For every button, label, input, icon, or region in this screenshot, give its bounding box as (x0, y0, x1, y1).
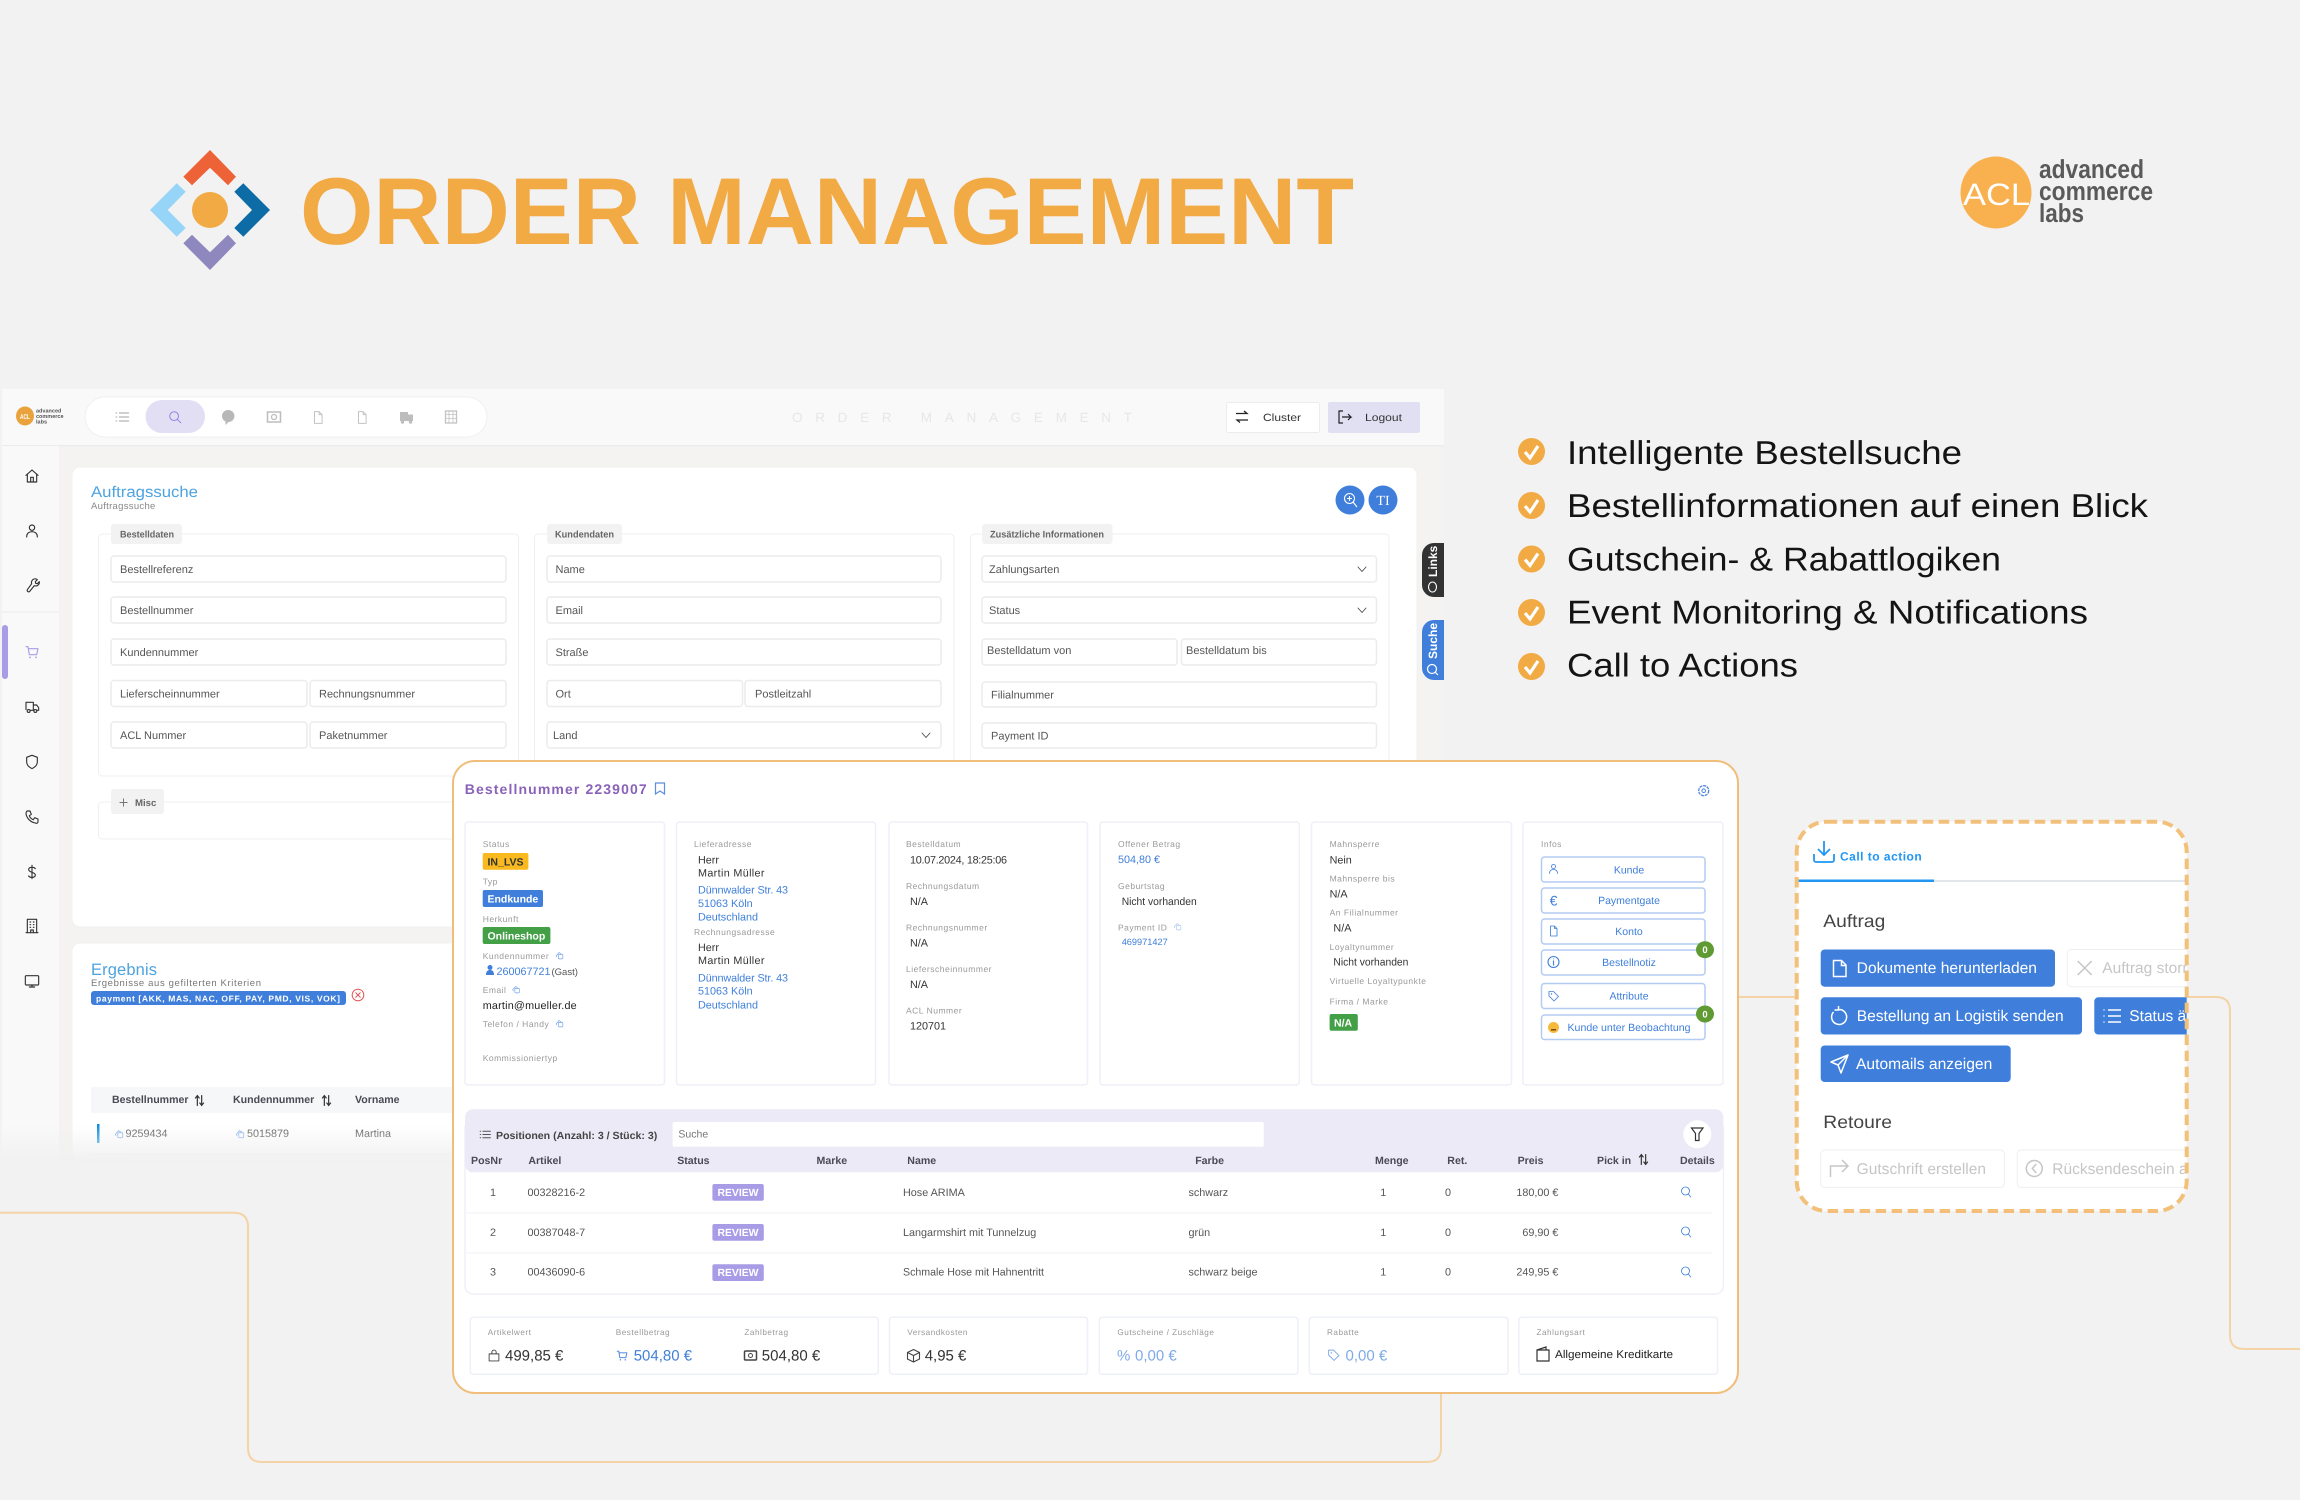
info panel: payment: Geburtstag (1118, 881, 1165, 891)
result table: Bestellnummer (112, 1094, 189, 1106)
fieldset: Bestelldaten: Rechnungsnummer (319, 688, 415, 700)
summary: Rabatte: Rabatte (1327, 1328, 1359, 1337)
button: Status ändern: Status ändern (2129, 1008, 2226, 1025)
badge: note count (1696, 941, 1714, 958)
badge: N/A (1330, 1014, 1358, 1031)
info panel: status: (Gast) (552, 967, 578, 978)
panel: call to action (1794, 820, 2189, 1213)
badge: note count: 0 (1702, 945, 1708, 956)
fieldset: Bestelldaten: Bestellnummer (120, 605, 194, 617)
summary: values: Bestellbetrag (616, 1328, 670, 1337)
summary: Zahlungsart: Allgemeine Kreditkarte (1555, 1349, 1673, 1361)
heading: Retoure: Retoure (1823, 1112, 1892, 1132)
info panel: infos buttons (1523, 822, 1723, 1085)
icon: monitor (25, 976, 39, 987)
button: Bestellnotiz: Bestellnotiz (1602, 957, 1656, 969)
badge: IN_LVS: IN_LVS (488, 856, 523, 868)
button: Bestellnotiz (1542, 950, 1705, 975)
fieldset: Bestelldaten: Paketnummer (319, 730, 388, 742)
button: Dokumente herunterladen (1821, 950, 2055, 987)
table row 1: schwarz (1188, 1187, 1228, 1199)
title: ORDER MANAGEMENT (300, 159, 1354, 265)
badge: Onlineshop (483, 927, 550, 944)
feature: Bestellinformationen auf einen Blick: Bestellinformationen auf einen Blick (1567, 487, 2149, 524)
table row 2: 2 (490, 1227, 496, 1239)
fieldset: Zusätzliche Informationen: Status (989, 605, 1021, 617)
fieldset: Kundendaten (534, 524, 954, 776)
result table: Kundennummer (233, 1094, 314, 1106)
table header: Preis (1518, 1155, 1544, 1167)
info panel: addresses: Martin Müller (698, 868, 765, 880)
summary: Zahlungsart (1519, 1317, 1718, 1374)
fieldset: Bestelldaten: ACL Nummer (120, 730, 187, 742)
table row 3: 00436090-6 (528, 1267, 585, 1279)
table header: PosNr (471, 1155, 502, 1167)
button: Attribute: Attribute (1609, 990, 1649, 1002)
panel: order details card (453, 761, 1738, 1393)
info panel: addresses: Herr (698, 942, 719, 954)
heading: Ergebnis: Ergebnis (91, 961, 157, 979)
summary: values: 499,85 € (505, 1348, 564, 1365)
button: Gutschrift erstellen (1821, 1150, 2004, 1187)
info panel: dates: Lieferscheinnummer (906, 964, 992, 974)
table row 1: Hose ARIMA (903, 1187, 966, 1199)
fieldset: Kundendaten: Postleitzahl (755, 688, 811, 700)
info panel: dunning and loyalty: Mahnsperre bis (1330, 873, 1395, 883)
text size button: TI (1376, 494, 1390, 509)
feature: Event Monitoring und Notifications: Event Monitoring & Notifications (1567, 594, 2088, 630)
summary: Versandkosten (890, 1317, 1088, 1374)
info panel: dunning and loyalty: N/A (1333, 923, 1352, 935)
info panel: addresses: Lieferadresse (694, 839, 752, 849)
info panel: dunning and loyalty: Mahnsperre (1330, 839, 1380, 849)
fieldset: Bestelldaten: Kundennummer (120, 647, 199, 659)
info panel: status: Status (483, 839, 510, 849)
table row 1: REVIEW (718, 1188, 759, 1199)
badge: N/A: N/A (1334, 1018, 1352, 1030)
table row 1: 00328216-2 (528, 1187, 585, 1199)
info panel: dates (889, 822, 1088, 1085)
info panel: dunning and loyalty: Nein (1330, 854, 1352, 866)
brand logo: advanced commerce labs: ACL (1963, 177, 2030, 212)
summary: Zahlungsart: Zahlungsart (1536, 1328, 1585, 1337)
summary: values (470, 1317, 878, 1374)
info panel: status: Telefon / Handy (483, 1019, 550, 1029)
watermark title: ORDER MANAGEMENT (792, 410, 1132, 425)
button: Status ändern (2094, 997, 2187, 1034)
info panel: addresses: 51063 Köln (698, 986, 753, 998)
fieldset: Zusätzliche Informationen: Payment ID (991, 730, 1049, 742)
button: Kunde: Kunde (1614, 864, 1644, 876)
icon: shield (27, 755, 37, 769)
info panel: payment: Payment ID (1118, 922, 1167, 932)
summary: values: 504,80 € (762, 1348, 821, 1365)
summary: Rabatte: 0,00 € (1346, 1348, 1388, 1365)
summary: Gutscheine: Gutscheine / Zuschläge (1117, 1328, 1214, 1337)
fieldset: Kundendaten: Email (556, 605, 583, 617)
button: Auftrag stornieren: Auftrag stornieren (2102, 960, 2226, 977)
fieldset: Zusätzliche Informationen: Zusätzliche Informationen (990, 530, 1104, 540)
button: Paymentgate (1542, 888, 1705, 913)
icon: truck (26, 702, 39, 712)
tab: Call to action: Call to action (1840, 850, 1922, 864)
info panel: addresses: Herr (698, 854, 719, 866)
result table: Vorname (355, 1094, 400, 1106)
fieldset: Kundendaten: Ort (556, 688, 571, 700)
filter chip (91, 991, 346, 1005)
brand logo: advanced commerce labs: labs (2039, 198, 2084, 228)
table header: Status (677, 1155, 710, 1167)
table row 2: 00387048-7 (528, 1227, 585, 1239)
fieldset: Zusätzliche Informationen (970, 524, 1389, 776)
panel: app screenshot (2, 389, 1444, 1161)
button: Bestellung an Logistik senden: Bestellung an Logistik senden (1857, 1008, 2064, 1025)
feature: Gutschein- und Rabattlogiken: Gutschein- & Rabattlogiken (1567, 540, 2001, 578)
info panel: dates: N/A (910, 979, 929, 991)
brand logo: advanced commerce labs: commerce (2039, 176, 2153, 206)
info panel: payment: 469971427 (1122, 937, 1168, 947)
table row 2 (490, 1224, 1691, 1241)
result table: 5015879 (247, 1128, 289, 1140)
fieldset: Zusätzliche Informationen: Zahlungsarten (989, 564, 1059, 576)
tab: Call to action (1797, 841, 2187, 882)
button: Auftrag stornieren (2067, 949, 2187, 988)
info panel: payment (1100, 822, 1299, 1085)
icon: settings (1699, 786, 1709, 796)
info panel: status: Typ (483, 877, 498, 887)
summary: values: Artikelwert (488, 1328, 532, 1337)
table row 3: schwarz beige (1188, 1267, 1258, 1279)
positions table (465, 1109, 1723, 1294)
info panel: dunning and loyalty: Firma / Marke (1330, 997, 1389, 1007)
info panel: dates: 10.07.2024, 18:25:06 (910, 854, 1007, 866)
result table: 9259434 (126, 1128, 168, 1140)
side tab: Links: Links (1426, 545, 1440, 577)
badge: Onlineshop: Onlineshop (488, 930, 545, 942)
table row 2: REVIEW (718, 1228, 759, 1239)
info panel: dunning and loyalty: Virtuelle Loyaltypunkte (1330, 976, 1426, 986)
table header (465, 1109, 1723, 1172)
fieldset: Zusätzliche Informationen: Bestelldatum bis (1186, 645, 1267, 657)
filter chip: payment [AKK, MAS, NAC, OFF, PAY, PMD, VIS, VOK] (96, 994, 340, 1004)
side tab: Links (1422, 543, 1444, 597)
mini logo: labs (36, 420, 47, 426)
badge: watch count (1696, 1006, 1714, 1022)
table header: Menge (1375, 1155, 1409, 1167)
info panel: status: Kundennummer (483, 951, 549, 961)
table header: Farbe (1195, 1155, 1224, 1167)
info panel: dunning and loyalty: Nicht vorhanden (1333, 957, 1408, 969)
table row 3: 249,95 € (1516, 1267, 1558, 1279)
brand logo: advanced commerce labs (1960, 154, 2153, 228)
title logo: diamond mark (150, 150, 270, 270)
info panel: addresses: Deutschland (698, 912, 758, 924)
info panel: addresses: Deutschland (698, 999, 758, 1011)
button: Kunde (1542, 857, 1705, 882)
info panel: status: Kommissioniertyp (483, 1053, 558, 1063)
fieldset: Bestelldaten (98, 524, 518, 776)
fieldset: Zusätzliche Informationen: Bestelldatum von (987, 645, 1071, 657)
info panel: dunning and loyalty: N/A (1330, 888, 1348, 900)
text size button (1368, 486, 1398, 514)
info panel: addresses (676, 822, 876, 1085)
table header: Suche (678, 1129, 708, 1141)
button: Bestellung an Logistik senden (1821, 997, 2082, 1034)
table header: Positionen (Anzahl: 3 / Stück: 3) (496, 1131, 657, 1142)
icon: home (26, 470, 38, 482)
button: Gutschrift erstellen: Gutschrift erstellen (1857, 1161, 1986, 1178)
fieldset: Bestelldaten: Bestellreferenz (120, 564, 193, 576)
mini logo (16, 406, 64, 426)
button: Automails anzeigen: Automails anzeigen (1856, 1056, 1992, 1073)
info panel: dates: Rechnungsdatum (906, 881, 980, 891)
info panel: addresses: Dünnwalder Str. 43 (698, 972, 788, 984)
logout button (1328, 402, 1420, 433)
button: Dokumente herunterladen: Dokumente herunterladen (1857, 960, 2037, 977)
table header: Ret. (1447, 1155, 1467, 1167)
table header: Artikel (528, 1155, 561, 1167)
navigation pill (85, 397, 487, 437)
button: Paymentgate: Paymentgate (1598, 895, 1660, 907)
badge: IN_LVS (483, 853, 528, 870)
button: Rücksendeschein anzeigen (2017, 1150, 2187, 1188)
logout button: Logout (1365, 412, 1402, 424)
mini logo: commerce (36, 414, 64, 420)
table row 1 (490, 1184, 1691, 1201)
bottom fade (2, 1125, 452, 1161)
table header: Pick in (1597, 1155, 1631, 1167)
connector line: right side (2186, 997, 2300, 1349)
button: Attribute (1542, 984, 1705, 1008)
table row 3: 0 (1445, 1267, 1451, 1279)
button: Rücksendeschein anzeigen: Rücksendeschein anzeigen (2052, 1161, 2242, 1178)
connector line: to call to action (1738, 996, 1797, 998)
icon: dollar (29, 865, 35, 879)
brand logo: advanced commerce labs: advanced (2039, 154, 2144, 184)
info panel: payment: Nicht vorhanden (1122, 896, 1197, 908)
button: Kunde unter Beobachtung: Kunde unter Beobachtung (1568, 1022, 1691, 1034)
subheading: Auftragssuche (91, 501, 156, 512)
summary: Versandkosten: Versandkosten (907, 1328, 968, 1337)
feature: Call to Actions: Call to Actions (1567, 646, 1798, 684)
table row 3: Schmale Hose mit Hahnentritt (903, 1267, 1044, 1279)
info panel: infos buttons: Infos (1541, 839, 1562, 849)
table row 1: 1 (1380, 1187, 1386, 1199)
fieldset: Misc: Misc (135, 798, 157, 809)
info panel: dates: 120701 (910, 1020, 946, 1032)
button: Konto: Konto (1615, 926, 1643, 938)
mini logo: advanced (36, 408, 61, 414)
info panel: addresses: Dünnwalder Str. 43 (698, 885, 788, 897)
icon: bookmark (656, 783, 664, 794)
info panel: status: 260067721 (496, 966, 551, 978)
summary: values: 504,80 € (634, 1348, 693, 1365)
table row 2: 1 (1380, 1227, 1386, 1239)
info panel: dunning and loyalty: An Filialnummer (1330, 908, 1399, 918)
icon: wrench (27, 579, 39, 592)
fieldset: Misc (98, 789, 518, 839)
info panel: status: martin@mueller.de (483, 1000, 577, 1012)
info panel: status: Email (483, 985, 506, 995)
table row 3: 3 (490, 1267, 496, 1279)
info panel: status: Herkunft (483, 914, 519, 924)
subheading: Ergebnisse: Ergebnisse aus gefilterten Kriterien (91, 978, 261, 989)
feature list (1518, 434, 2149, 684)
panel: Ergebnis (72, 943, 1417, 1161)
table row 1: 0 (1445, 1187, 1451, 1199)
icon: cart (26, 647, 38, 658)
fieldset: Kundendaten: Land (553, 730, 577, 742)
info panel: dunning and loyalty (1312, 822, 1512, 1085)
info panel: dates: N/A (910, 937, 929, 949)
fieldset: Kundendaten: Straße (556, 647, 589, 659)
badge: Endkunde (483, 890, 543, 907)
summary: values: Zahlbetrag (744, 1328, 789, 1337)
info panel: dunning and loyalty: Loyaltynummer (1330, 942, 1394, 952)
fieldset: Bestelldaten: Lieferscheinnummer (120, 688, 220, 700)
info panel: dates: Rechnungsnummer (906, 922, 988, 932)
info panel: status (465, 822, 664, 1085)
feature: Intelligente Bestellsuche: Intelligente Bestellsuche (1567, 434, 1962, 471)
summary: Gutscheine: 0,00 € (1135, 1348, 1177, 1365)
app top bar (2, 389, 1444, 446)
fieldset: Kundendaten: Kundendaten (555, 530, 614, 540)
table row 2: grün (1188, 1227, 1210, 1239)
info panel: dates: Bestelldatum (906, 839, 961, 849)
result table: Martina (355, 1128, 391, 1140)
info panel: dates: N/A (910, 896, 929, 908)
heading: Auftrag: Auftrag (1823, 911, 1885, 931)
button: Automails anzeigen (1821, 1046, 2011, 1082)
search icon button (1336, 486, 1364, 514)
button: Paymentgate: € (1550, 892, 1558, 908)
panel: Auftragssuche (72, 467, 1417, 927)
table row 2: 0 (1445, 1227, 1451, 1239)
summary: Versandkosten: 4,95 € (925, 1348, 967, 1365)
table row 2: 69,90 € (1522, 1227, 1558, 1239)
cluster button (1226, 402, 1320, 432)
table row 3: REVIEW (718, 1268, 759, 1279)
info panel: dates: ACL Nummer (906, 1005, 962, 1015)
fieldset: Zusätzliche Informationen: Filialnummer (991, 690, 1054, 702)
side tab: Suche (1422, 620, 1444, 680)
icon: building (26, 919, 38, 933)
summary: Rabatte (1309, 1317, 1508, 1374)
result table (91, 1087, 453, 1155)
info panel: payment: 504,80 € (1118, 854, 1160, 866)
table row 1: 1 (490, 1187, 496, 1199)
sidebar (2, 446, 59, 1161)
icon: phone (26, 811, 38, 823)
side tab: Suche: Suche (1426, 623, 1440, 659)
table row 1: 180,00 € (1516, 1187, 1558, 1199)
badge: Endkunde: Endkunde (488, 894, 538, 906)
summary: Gutscheine: % (1117, 1348, 1130, 1365)
info panel: addresses: Martin Müller (698, 955, 765, 967)
button: Konto (1542, 919, 1705, 944)
badge: watch count: 0 (1702, 1010, 1708, 1020)
info panel: addresses: 51063 Köln (698, 898, 753, 910)
table header: Details (1680, 1155, 1715, 1167)
table row 2: Langarmshirt mit Tunnelzug (903, 1227, 1036, 1239)
table header: Marke (816, 1155, 847, 1167)
fieldset: Bestelldaten: Bestelldaten (120, 530, 174, 540)
table row 3 (490, 1264, 1691, 1281)
info panel: payment: Offener Betrag (1118, 839, 1181, 849)
icon: clear filter (352, 989, 364, 1001)
button: Kunde unter Beobachtung (1542, 1015, 1705, 1040)
icon: user (27, 525, 37, 537)
connector line: bottom left (0, 1213, 1441, 1462)
heading: order number: Bestellnummer 2239007 (465, 781, 647, 797)
table row 3: 1 (1380, 1267, 1386, 1279)
summary: Gutscheine (1099, 1317, 1298, 1374)
fieldset: Kundendaten: Name (556, 564, 585, 576)
heading: Auftragssuche: Auftragssuche (91, 484, 198, 501)
info panel: addresses: Rechnungsadresse (694, 927, 775, 937)
table header: Name (907, 1155, 936, 1167)
cluster button: Cluster (1263, 412, 1302, 424)
mini logo: ACL (20, 414, 31, 421)
